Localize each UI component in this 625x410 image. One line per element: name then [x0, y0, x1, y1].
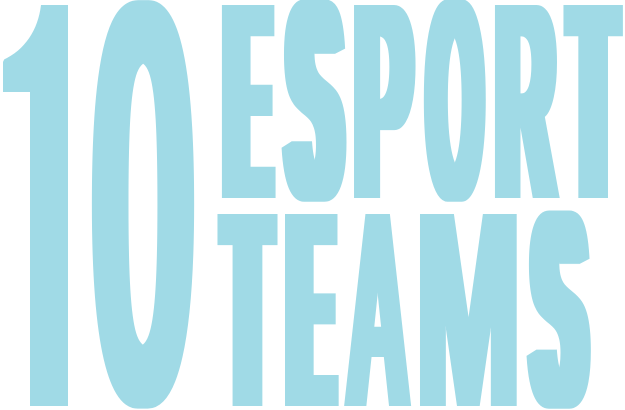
heading word: ESPORT — [228, 0, 614, 261]
heading word: TEAMS — [227, 153, 584, 410]
numeral: 10 — [0, 0, 197, 410]
